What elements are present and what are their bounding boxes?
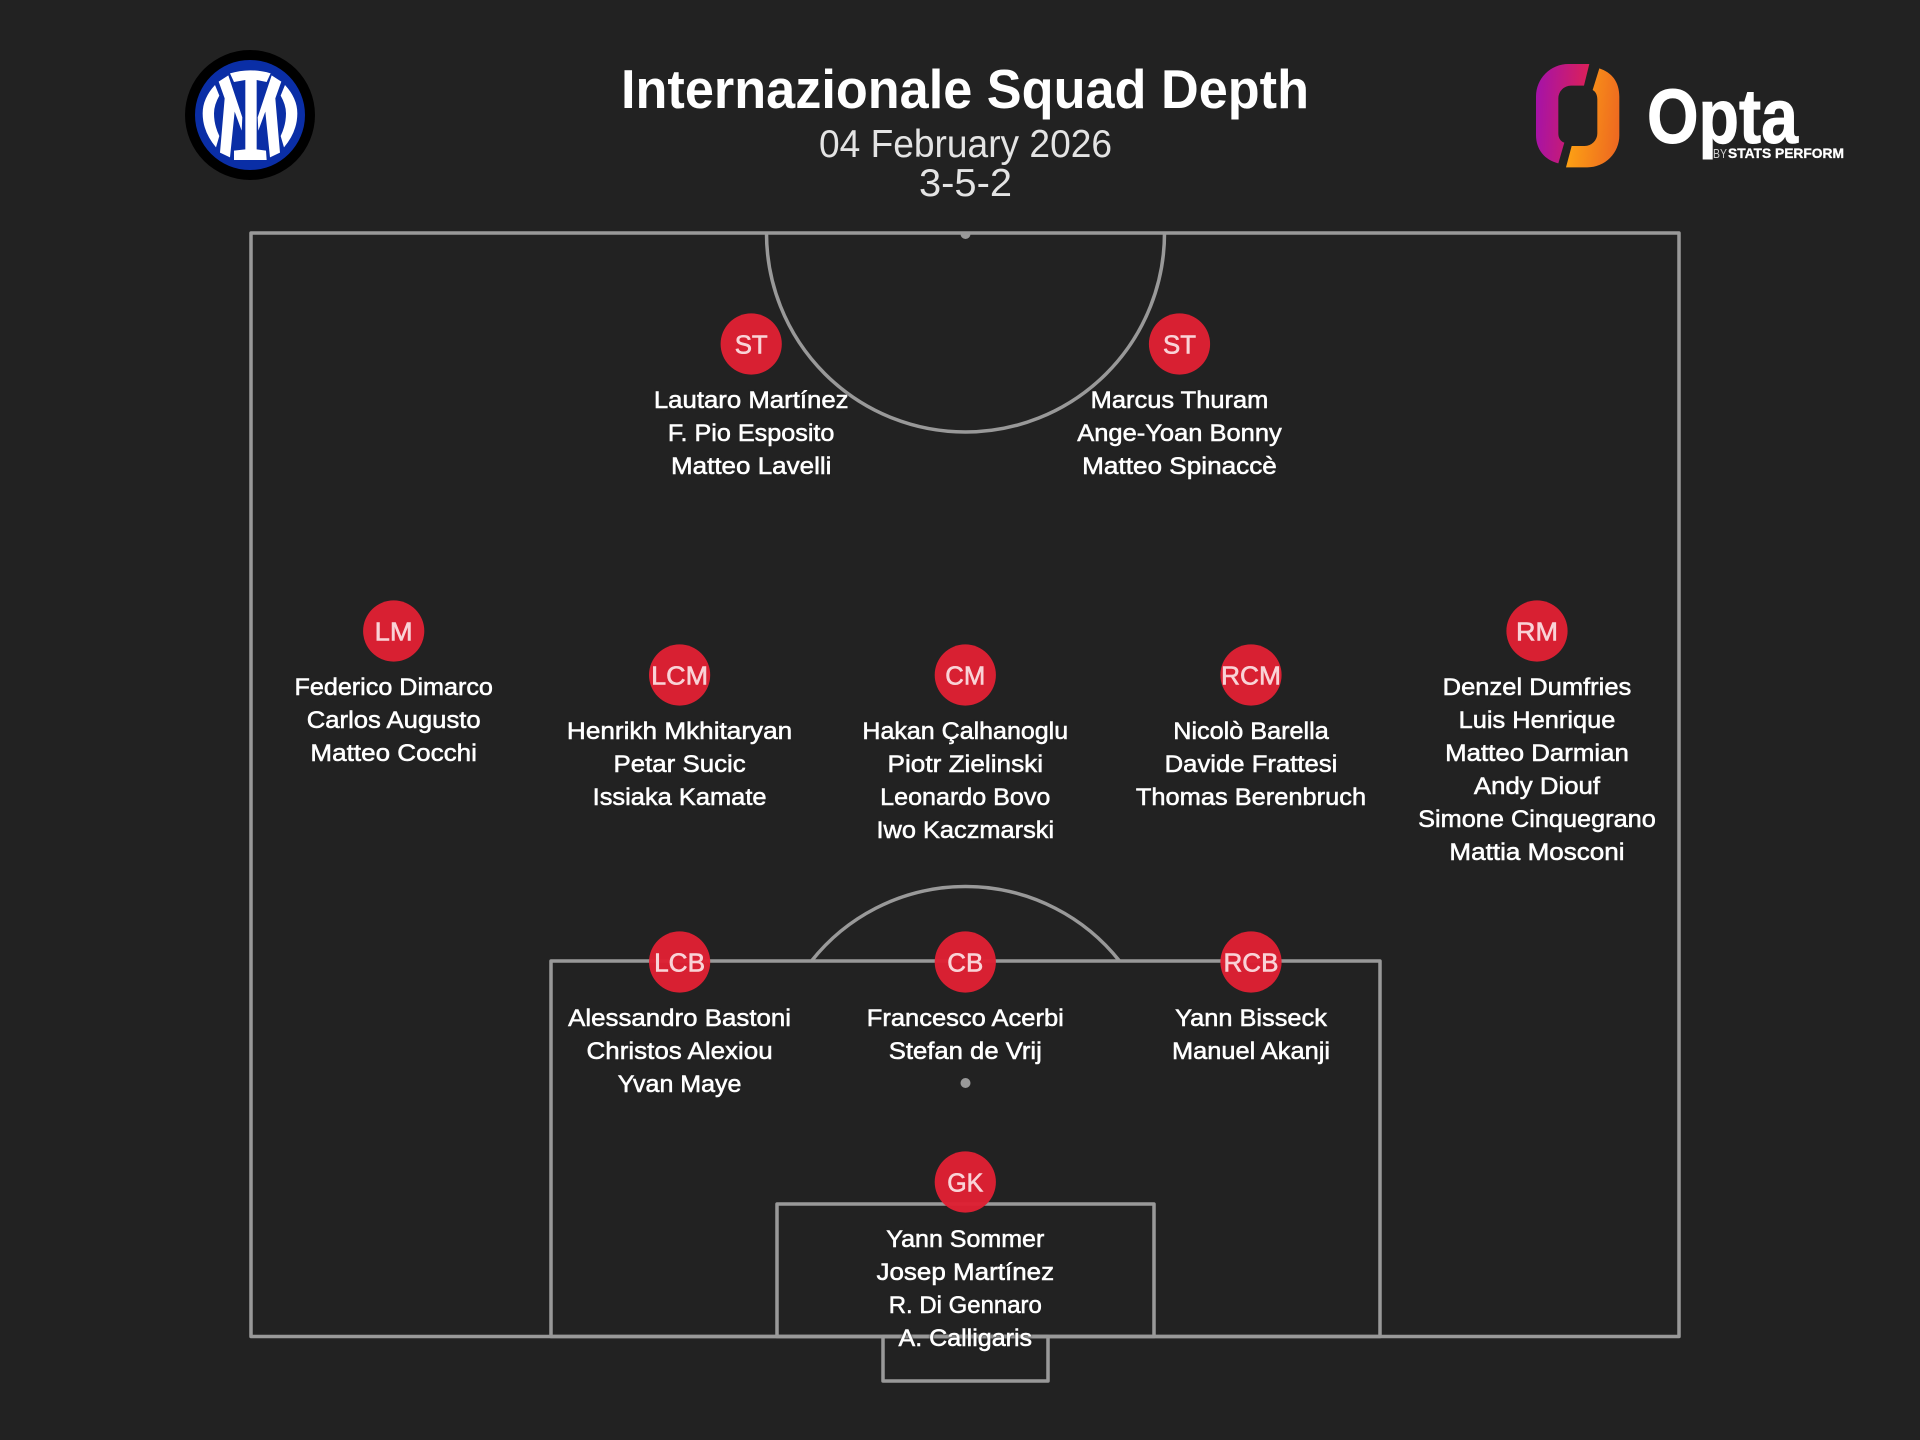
names: centre midfielder: Leonardo Bovo [880, 784, 1050, 811]
names: right striker: Matteo Spinaccè [1082, 453, 1277, 480]
marker: LCM: LCM [651, 660, 708, 690]
names: centre midfielder [862, 718, 1068, 844]
marker: CM [935, 644, 996, 706]
title: Internazionale Squad Depth [621, 58, 1309, 120]
player group: right midfielder [1418, 600, 1656, 866]
names: centre back [867, 1005, 1064, 1065]
player group: left midfielder [295, 600, 493, 767]
player group: left striker [654, 313, 849, 480]
player group: goalkeeper [876, 1151, 1054, 1352]
marker: CM: CM [945, 660, 985, 690]
names: centre midfielder: Iwo Kaczmarski [876, 817, 1054, 844]
marker: RCB [1220, 931, 1282, 993]
names: right midfielder: Andy Diouf [1474, 773, 1600, 800]
names: goalkeeper: A. Calligaris [899, 1325, 1032, 1352]
names: left midfielder: Carlos Augusto [307, 707, 481, 734]
marker: LCB [649, 931, 710, 993]
marker: CB: CB [947, 948, 983, 978]
names: right midfielder: Luis Henrique [1459, 707, 1615, 734]
pitch markings [251, 233, 1679, 1381]
names: centre back: Francesco Acerbi [867, 1005, 1064, 1032]
names: left midfielder: Federico Dimarco [295, 674, 493, 701]
names: right centre back: Manuel Akanji [1172, 1038, 1330, 1065]
marker: CB [935, 931, 996, 993]
marker: RM [1506, 600, 1568, 662]
marker: RCM: RCM [1221, 660, 1281, 690]
names: left striker [654, 387, 849, 480]
names: left centre midfielder [567, 718, 792, 811]
logo: Opta by Stats Perform: Opta [1647, 74, 1799, 160]
names: left centre midfielder: Henrikh Mkhitaryan [567, 718, 792, 745]
marker: ST [1149, 313, 1210, 375]
names: right striker: Ange-Yoan Bonny [1077, 420, 1283, 447]
names: right midfielder: Denzel Dumfries [1443, 674, 1631, 701]
names: centre back: Stefan de Vrij [889, 1038, 1042, 1065]
formation subtitle: 3-5-2 [919, 162, 1012, 205]
player group: right striker [1077, 313, 1283, 480]
marker: RM: RM [1516, 616, 1558, 646]
names: left midfielder [295, 674, 493, 767]
date subtitle: 04 February 2026 [819, 123, 1112, 166]
player group: right centre back [1172, 931, 1330, 1065]
marker: ST [721, 313, 782, 375]
marker: LM: LM [375, 616, 413, 646]
names: goalkeeper: Yann Sommer [886, 1226, 1044, 1253]
names: left striker: Lautaro Martínez [654, 387, 849, 414]
names: left centre back: Christos Alexiou [587, 1038, 773, 1065]
names: right centre back [1172, 1005, 1330, 1065]
names: centre midfielder: Piotr Zielinski [888, 751, 1043, 778]
names: right centre midfielder [1136, 718, 1366, 811]
names: left centre back: Yvan Maye [618, 1071, 741, 1098]
names: left striker: F. Pio Esposito [668, 420, 834, 447]
names: right centre back: Yann Bisseck [1175, 1005, 1328, 1032]
player group: centre back [867, 931, 1064, 1065]
marker: LM [363, 600, 424, 662]
marker: RCB: RCB [1224, 948, 1278, 978]
names: right centre midfielder: Thomas Berenbruch [1136, 784, 1366, 811]
names: right midfielder: Mattia Mosconi [1449, 839, 1625, 866]
names: right striker: Marcus Thuram [1091, 387, 1268, 414]
names: goalkeeper: R. Di Gennaro [889, 1292, 1042, 1319]
marker: LCM [649, 644, 710, 706]
club badge: Inter [185, 50, 315, 180]
names: right midfielder: Matteo Darmian [1445, 740, 1629, 767]
player group: right centre midfielder [1136, 644, 1366, 811]
names: goalkeeper: Josep Martínez [876, 1259, 1054, 1286]
names: right striker [1077, 387, 1283, 480]
player group: centre midfielder [862, 644, 1068, 844]
marker: ST: ST [735, 330, 768, 360]
logo: Opta by Stats Perform: STATS PERFORM [1728, 145, 1844, 161]
marker: GK: GK [947, 1168, 984, 1198]
marker: GK [935, 1151, 996, 1213]
names: right midfielder [1418, 674, 1656, 866]
marker: RCM [1220, 644, 1282, 706]
player group: left centre midfielder [567, 644, 792, 811]
names: right centre midfielder: Nicolò Barella [1173, 718, 1329, 745]
names: left centre back [568, 1005, 791, 1098]
names: left centre midfielder: Issiaka Kamate [593, 784, 767, 811]
logo: Opta by Stats Perform [1536, 64, 1844, 167]
logo: Opta by Stats Perform: BY [1713, 146, 1727, 161]
names: left striker: Matteo Lavelli [671, 453, 831, 480]
names: right midfielder: Simone Cinquegrano [1418, 806, 1656, 833]
names: left centre back: Alessandro Bastoni [568, 1005, 791, 1032]
names: centre midfielder: Hakan Çalhanoglu [862, 718, 1068, 745]
names: left midfielder: Matteo Cocchi [310, 740, 477, 767]
names: left centre midfielder: Petar Sucic [614, 751, 746, 778]
names: goalkeeper [876, 1226, 1054, 1352]
player group: left centre back [568, 931, 791, 1098]
marker: LCB: LCB [654, 948, 705, 978]
marker: ST: ST [1163, 330, 1196, 360]
names: right centre midfielder: Davide Frattesi [1165, 751, 1337, 778]
